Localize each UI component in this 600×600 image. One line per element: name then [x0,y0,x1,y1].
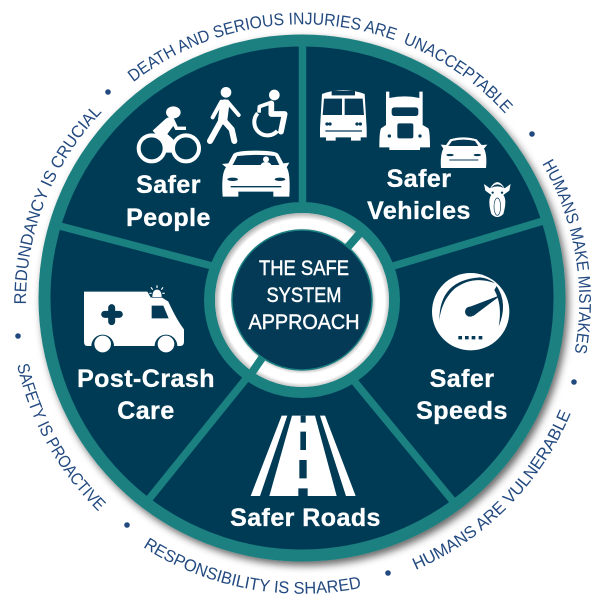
ring text: safety is proactive: SAFETY IS PROACTIVE [18,364,106,512]
ring text: humans are vulnerable: HUMANS ARE VULNERABLE [412,409,570,570]
panel: safer vehicles icons [320,90,511,217]
heading: safer people: Safer [136,171,201,199]
panel: safer people icons [139,87,290,197]
heading: post-crash care: Care [117,397,175,425]
heading: safer speeds: Speeds [416,397,508,425]
centre title: SYSTEM [266,284,342,307]
ring text: responsibility is shared: RESPONSIBILITY IS SHARED [144,538,360,594]
icon: wheelchair [254,90,285,135]
ring text: death and serious injuries: DEATH AND SERIOUS INJURIES ARE UNACCEPTABLE [127,12,514,114]
panel: safer speeds icon [432,273,509,350]
icon: motorcycle [484,182,511,217]
icon: pedestrian [210,87,239,141]
centre title: APPROACH [248,311,360,334]
icon: road [251,416,356,496]
heading: safer vehicles: Vehicles [367,197,471,225]
panel: safer roads icon [251,416,356,496]
heading: safer people [126,171,211,232]
heading: safer vehicles [367,165,471,225]
heading: post-crash care [77,365,215,425]
panel: post-crash care icon [84,285,184,352]
icon: bus [320,90,367,141]
heading: safer people: People [126,204,211,232]
icon: ambulance [84,285,184,352]
centre title: THE SAFE [259,257,349,280]
heading: post-crash care: Post-Crash [77,365,215,393]
centre hub ring [210,208,394,392]
centre title [248,257,360,334]
heading: safer vehicles: Safer [387,165,451,193]
ring text: redundancy is crucial: REDUNDANCY IS CRUCIAL [14,108,102,304]
heading: safer speeds: Safer [430,365,494,393]
icon: car with driver [222,151,290,197]
icon: cyclist [139,106,199,161]
icon: car [441,137,487,168]
outer wheel [44,40,560,556]
heading: safer roads: Safer Roads [230,504,381,532]
heading: safer speeds [416,365,508,425]
ring separator dots [15,89,577,576]
icon: truck [379,92,430,150]
icon: speedometer [432,273,509,350]
segment dividers [52,45,548,506]
ring text: humans make mistakes: HUMANS MAKE MISTAKES [542,158,592,354]
